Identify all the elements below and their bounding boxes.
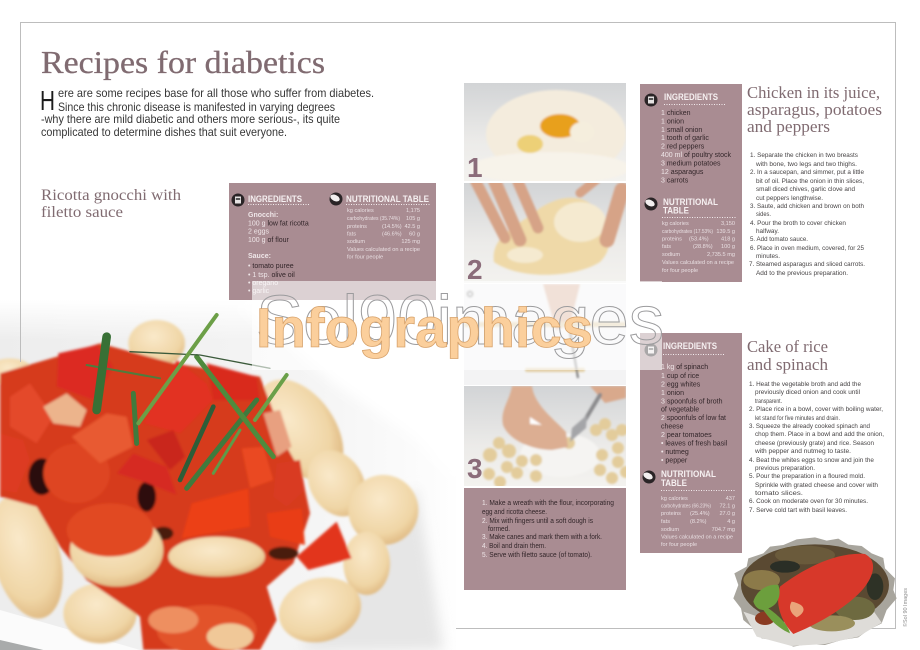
nutrition table: fats [662, 244, 671, 250]
panel: preparation steps: 3. Make canes and mark them with a fork. [482, 534, 602, 541]
cake ingredient list: 2 pear tomatoes [661, 432, 712, 439]
chicken preparation steps: 4. Pour the broth to cover chicken [750, 220, 846, 227]
cake ingredient list: 1 cup of rice [661, 373, 699, 380]
icon: plate of food [644, 198, 658, 210]
cake ingredient list: cheese [661, 424, 684, 430]
panel: preparation steps: 1. Make a wreath with the flour, incorporating [482, 500, 614, 507]
panel: preparation steps: 2. Mix with fingers until a soft dough is [482, 518, 593, 525]
nutrition table: 437 [726, 496, 735, 502]
chicken ingredient list: 1 small onion [661, 127, 702, 134]
cake ingredient list: 2 egg whites [661, 382, 701, 388]
watermark: Infographics: Infographics [256, 296, 593, 359]
cake preparation steps: 7. Serve cold tart with basil leaves. [749, 507, 847, 514]
nutrition table [661, 496, 735, 548]
nutrition table: sodium [661, 527, 679, 533]
nutrition table: sodium [347, 239, 365, 245]
chicken preparation steps: 1. Separate the chicken in two breasts [750, 152, 859, 159]
gnocchi ingredient list: 100 g of flour [248, 237, 290, 244]
nutrition table: proteins [347, 224, 367, 230]
photo step 3: marking with fork [464, 284, 626, 385]
panel: cake ingredients and nutrition: NUTRITIONAL [661, 469, 716, 479]
recipe heading: chicken: asparagus, potatoes [747, 100, 882, 119]
icon: recipe card [644, 94, 658, 106]
watermark: Sol90images outline: Sol90images [256, 281, 664, 359]
chicken preparation steps: sides. [756, 211, 771, 218]
chicken preparation steps: 3. Saute, add chicken and brown on both [750, 203, 864, 210]
nutrition table: 418 g [721, 236, 735, 242]
panel: chicken ingredients and nutrition [640, 84, 742, 282]
nutrition table: 3,150 [721, 221, 735, 227]
nutrition table: kg calories [661, 496, 688, 502]
panel: gnocchi ingredients and nutrition [229, 183, 436, 301]
panel: cake ingredients and nutrition [640, 333, 742, 553]
cake ingredient list: 1 onion [661, 390, 684, 397]
sauced gnocchi [70, 513, 163, 587]
chicken preparation steps [749, 152, 865, 277]
recipe heading: ricotta gnocchi [41, 187, 181, 221]
cake preparation steps: tomato slices. [755, 490, 803, 497]
cake ingredient list: • leaves of fresh basil [661, 440, 728, 448]
chives garnish [87, 315, 287, 488]
number 2: 2 [467, 254, 483, 285]
icon: plate of food [642, 470, 656, 484]
nutrition table [662, 221, 735, 274]
cake preparation steps: 5. Pour the preparation in a floured mold. [749, 473, 865, 480]
tomato sauce base [0, 343, 310, 650]
nutrition table: carbohydrates (66.23%) [661, 504, 711, 510]
photo step 2: kneading dough [464, 180, 626, 283]
intro text: -why there are mild diabetic and others more serious-, its quite [41, 112, 340, 126]
chicken ingredient list: 3 carrots [661, 178, 689, 184]
chicken preparation steps: Add to the previous preparation. [756, 270, 848, 277]
nutrition table [347, 208, 420, 260]
gnocchi ingredient list: 100 g low fat ricotta [248, 220, 309, 228]
cake preparation steps: transparent. [755, 398, 782, 405]
panel: chicken ingredients and nutrition: INGREDIENTS [664, 92, 718, 102]
icon: recipe card [232, 194, 244, 206]
gnocchi ingredient list: • 1 tsp. olive oil [248, 272, 295, 279]
panel: preparation steps: 5. Serve with filetto sauce (of tomato). [482, 552, 592, 559]
cake preparation steps: 4. Beat the whites eggs to snow and join the [749, 457, 874, 464]
title: Recipes for diabetics [41, 44, 325, 80]
panel: preparation steps: formed. [488, 526, 510, 533]
nutrition table: Values calculated on a recipe [347, 247, 420, 253]
panel: cake ingredients and nutrition: INGREDIENTS [663, 341, 717, 351]
main photo: gnocchi with tomato sauce [0, 300, 460, 650]
chicken ingredient list: 3 medium potatoes [661, 160, 721, 168]
gnocchi ingredient list [248, 212, 309, 295]
icon: plate of food [329, 192, 342, 206]
chicken ingredient list: 12 asparagus [661, 169, 704, 176]
cake ingredient list: 2 spoonfuls of low fat [661, 415, 726, 422]
cake preparation steps: cheese (previously grate) and rice. Season [755, 440, 874, 447]
nutrition table: (8.2%) [690, 519, 707, 525]
panel: preparation steps: 4. Boil and drain them. [482, 543, 546, 550]
nutrition table: (28.8%) [693, 244, 713, 250]
nutrition table: sodium [662, 252, 680, 258]
nutrition table: proteins [662, 236, 682, 242]
cake preparation steps: previously diced onion and cook until [755, 389, 860, 396]
shadows between gnocchi [28, 458, 55, 495]
recipe heading: ricotta gnocchi: filetto sauce [41, 204, 123, 221]
nutrition table: carbohydrates (35.74%) [347, 216, 400, 222]
panel: gnocchi ingredients and nutrition: NUTRITIONAL TABLE [346, 194, 429, 204]
gnocchi [0, 320, 418, 650]
intro text: complicated to determine dishes that suit everyone. [41, 125, 287, 139]
number 3: 3 [467, 453, 483, 484]
chicken preparation steps: 2. In a saucepan, and simmer, put a little [750, 169, 864, 176]
watermark wash [252, 281, 662, 370]
nutrition table: for four people [662, 268, 698, 274]
tomato pieces [0, 345, 352, 570]
cake preparation steps: Sprinkle with grated cheese and cover with [755, 482, 878, 489]
gnocchi ingredient list: Gnocchi: [248, 212, 278, 219]
chicken preparation steps: cut peppers lengthwise. [756, 195, 823, 202]
chicken preparation steps: with bone, two legs and two thighs. [755, 161, 857, 168]
left frame line over photo [20, 300, 22, 362]
photo step 4: shaping gnocchi [464, 386, 632, 488]
nutrition table: kg calories [662, 221, 689, 227]
nutrition table: (53.4%) [689, 236, 709, 242]
gnocchi ingredient list: • tomato puree [248, 263, 294, 270]
cake preparation steps [749, 381, 884, 514]
panel: gnocchi ingredients and nutrition: INGREDIENTS [248, 194, 302, 204]
nutrition table: for four people [661, 542, 697, 548]
cake ingredient list: • pepper [661, 458, 688, 464]
nutrition table: 105 g [406, 216, 420, 222]
recipe heading: cake: Cake of rice [747, 337, 828, 356]
nutrition table: 27.0 g [719, 511, 735, 517]
nutrition table: (14.5%) [382, 224, 402, 230]
panel: preparation steps: egg and ricotta cheese. [482, 509, 547, 516]
chicken ingredient list: 1 tooth of garlic [661, 135, 709, 142]
nutrition table: for four people [347, 254, 383, 260]
nutrition table: carbohydrates (17.53%) [662, 229, 713, 235]
intro text: Since this chronic disease is manifested in varying degrees [58, 100, 335, 114]
chicken preparation steps: halfway. [756, 228, 779, 235]
gnocchi ingredient list: Sauce: [248, 253, 271, 260]
nutrition table: Values calculated on a recipe [661, 534, 733, 540]
recipe heading: chicken [747, 83, 882, 136]
cake preparation steps: chop them. Place in a bowl and add the onion, [755, 431, 884, 438]
cake preparation steps: 2. Place rice in a bowl, cover with boiling water, [749, 406, 883, 413]
gnocchi ingredient list: • garlic [248, 288, 270, 295]
cake preparation steps: with pepper and nutmeg to taste. [754, 448, 851, 455]
nutrition table: 4 g [727, 519, 735, 525]
nutrition table: (46.6%) [382, 232, 402, 238]
nutrition table: fats [661, 519, 670, 525]
nutrition table: 704.7 mg [712, 527, 735, 533]
nutrition table: 125 mg [401, 239, 420, 245]
recipe heading: cake: and spinach [747, 355, 829, 374]
nutrition table: 2,735.5 mg [707, 252, 735, 258]
cake ingredient list: 1 kg of spinach [661, 364, 708, 371]
cake preparation steps: previous preparation. [755, 465, 815, 472]
chicken preparation steps: small diced chives, garlic clove and [756, 186, 855, 193]
recipe heading: chicken: and peppers [747, 117, 830, 136]
chicken ingredient list: 1 onion [661, 118, 684, 126]
cake preparation steps: let stand for five minutes and drain. [755, 415, 840, 422]
nutrition table: 42.5 g [404, 224, 420, 230]
cake ingredient list [661, 364, 728, 464]
cake preparation steps: 3. Squeeze the already cooked spinach and [749, 423, 870, 430]
chicken ingredient list [661, 110, 731, 184]
chicken ingredient list: 1 chicken [661, 110, 691, 117]
intro text: ere are some recipes base for all those who suffer from diabetes. [58, 86, 374, 100]
drop cap: H [40, 85, 55, 116]
photo step 1: egg on flour [464, 83, 630, 184]
chicken preparation steps: 6. Place in oven medium, covered, for 25 [750, 245, 864, 252]
cake ingredient list: of vegetable [661, 406, 699, 414]
gnocchi ingredient list: 2 eggs [248, 228, 270, 236]
nutrition table: 139.5 g [716, 229, 735, 235]
nutrition table: kg calories [347, 208, 374, 214]
nutrition table: 60 g [409, 232, 420, 238]
icon: recipe card [644, 344, 658, 356]
cake ingredient list: 3 spoonfuls of broth [661, 398, 723, 406]
chicken preparation steps: minutes. [756, 253, 780, 260]
cake preparation steps: 6. Cook on moderate oven for 30 minutes. [749, 498, 868, 505]
cake preparation steps: 1. Heat the vegetable broth and add the [749, 381, 861, 388]
plate shading [310, 498, 444, 650]
chicken ingredient list: 400 ml of poultry stock [661, 152, 731, 159]
panel: preparation steps [464, 488, 626, 590]
chicken ingredient list: 2 red peppers [661, 144, 705, 150]
gnocchi ingredient list: • oregano [248, 280, 278, 287]
panel: chicken ingredients and nutrition: TABLE [663, 206, 689, 216]
chicken preparation steps: bit of oil. Place the onion in thin slices, [756, 178, 864, 185]
recipe heading: ricotta gnocchi: Ricotta gnocchi with [41, 187, 181, 204]
nutrition table: proteins [661, 511, 681, 517]
copyright credit: ©Sol 90 Images [902, 588, 909, 627]
photo: rice and spinach tart [733, 537, 897, 647]
cake ingredient list: • nutmeg [661, 449, 689, 456]
nutrition table: 100 g [721, 244, 735, 250]
recipe heading: chicken: Chicken in its juice, [747, 83, 880, 102]
nutrition table: 72.1 g [719, 504, 735, 510]
number 1: 1 [467, 152, 483, 183]
chicken preparation steps: 5. Add tomato sauce. [750, 236, 808, 243]
intro text [40, 85, 374, 139]
recipe heading: cake [747, 337, 829, 374]
chicken preparation steps: 7. Steamed asparagus and sliced carrots. [749, 261, 865, 268]
nutrition table: Values calculated on a recipe [662, 260, 734, 266]
nutrition table: 1,175 [406, 208, 420, 214]
panel: cake ingredients and nutrition: TABLE [661, 478, 687, 488]
panel: chicken ingredients and nutrition: NUTRITIONAL [663, 197, 718, 207]
nutrition table: fats [347, 232, 356, 238]
nutrition table: (25.4%) [690, 511, 710, 517]
